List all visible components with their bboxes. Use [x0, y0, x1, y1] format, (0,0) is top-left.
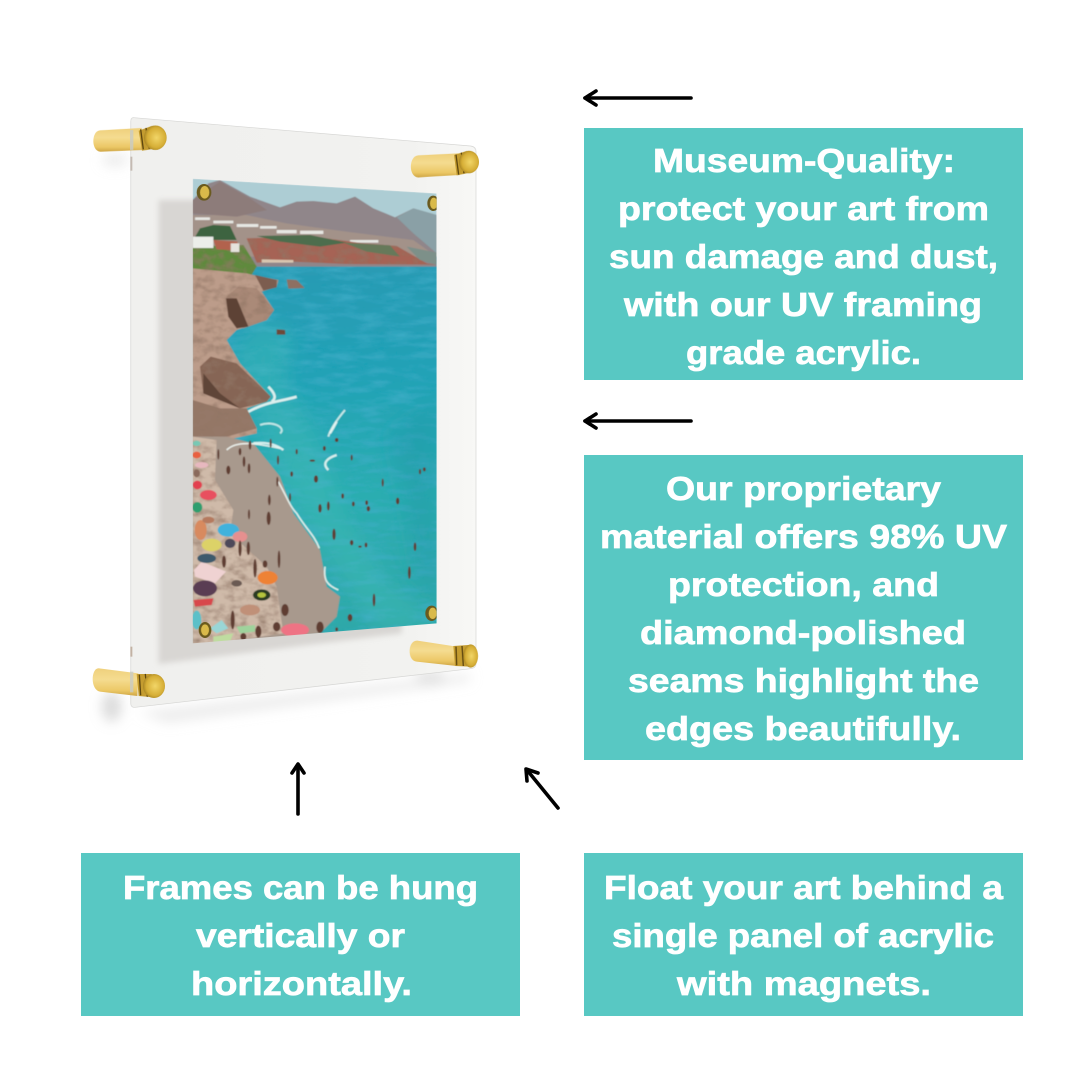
gold standoff bottom left	[93, 668, 165, 698]
callout: hanging orientation: horizontally.	[191, 965, 412, 1002]
callout: floating panel: single panel of acrylic	[612, 917, 994, 954]
callout: UV protection	[584, 455, 1023, 760]
callout: hanging orientation	[81, 853, 520, 1016]
magnet screws	[197, 184, 439, 638]
soft wall shadows around frame	[102, 153, 470, 723]
umbrellas and towels	[200, 490, 217, 500]
callout: museum-quality: sun damage and dust,	[609, 238, 998, 275]
callout: museum-quality: grade acrylic.	[686, 334, 921, 371]
acrylic edge refraction	[130, 157, 132, 657]
callout: floating panel	[584, 853, 1023, 1016]
swimmers and sunbathers	[217, 438, 426, 640]
beach photograph	[192, 179, 439, 647]
callout: UV protection: seams highlight the	[628, 662, 979, 699]
surf lines	[227, 444, 338, 590]
callout: museum-quality: with our UV framing	[623, 286, 982, 323]
callout: UV protection: diamond-polished	[640, 614, 966, 651]
town	[195, 217, 378, 243]
callout: UV protection: Our proprietary	[666, 470, 942, 507]
gold standoff top left	[93, 125, 167, 152]
rocky cliffs	[193, 268, 278, 440]
gold standoff top right	[411, 151, 479, 177]
callout: hanging orientation: vertically or	[196, 917, 405, 954]
acrylic panel	[131, 118, 476, 707]
foam	[248, 387, 297, 412]
callout: UV protection: material offers 98% UV	[600, 518, 1007, 555]
arrow: floating panel callout	[526, 769, 558, 808]
framed artwork product photo	[93, 118, 479, 723]
mountains	[193, 180, 437, 267]
sky	[193, 179, 437, 233]
arrow: hanging orientation callout	[292, 764, 304, 814]
callout: museum-quality: Museum-Quality:	[653, 142, 955, 179]
callout: floating panel: Float your art behind a	[604, 869, 1004, 906]
photo shadow on wall	[159, 200, 402, 664]
callout: hanging orientation: Frames can be hung	[123, 869, 478, 906]
arrow: museum-quality callout	[585, 91, 691, 105]
sea	[193, 257, 439, 647]
red coast cliffs	[247, 237, 436, 265]
callout: floating panel: with magnets.	[676, 965, 931, 1002]
callout: UV protection: edges beautifully.	[645, 710, 961, 747]
sand	[193, 437, 340, 647]
arrow: UV protection callout	[585, 414, 691, 428]
callout: museum-quality	[584, 128, 1023, 380]
left green hill and villa	[193, 245, 257, 277]
callout: UV protection: protection, and	[668, 566, 939, 603]
callout: museum-quality: protect your art from	[618, 190, 989, 227]
gold standoff bottom right	[410, 641, 478, 668]
